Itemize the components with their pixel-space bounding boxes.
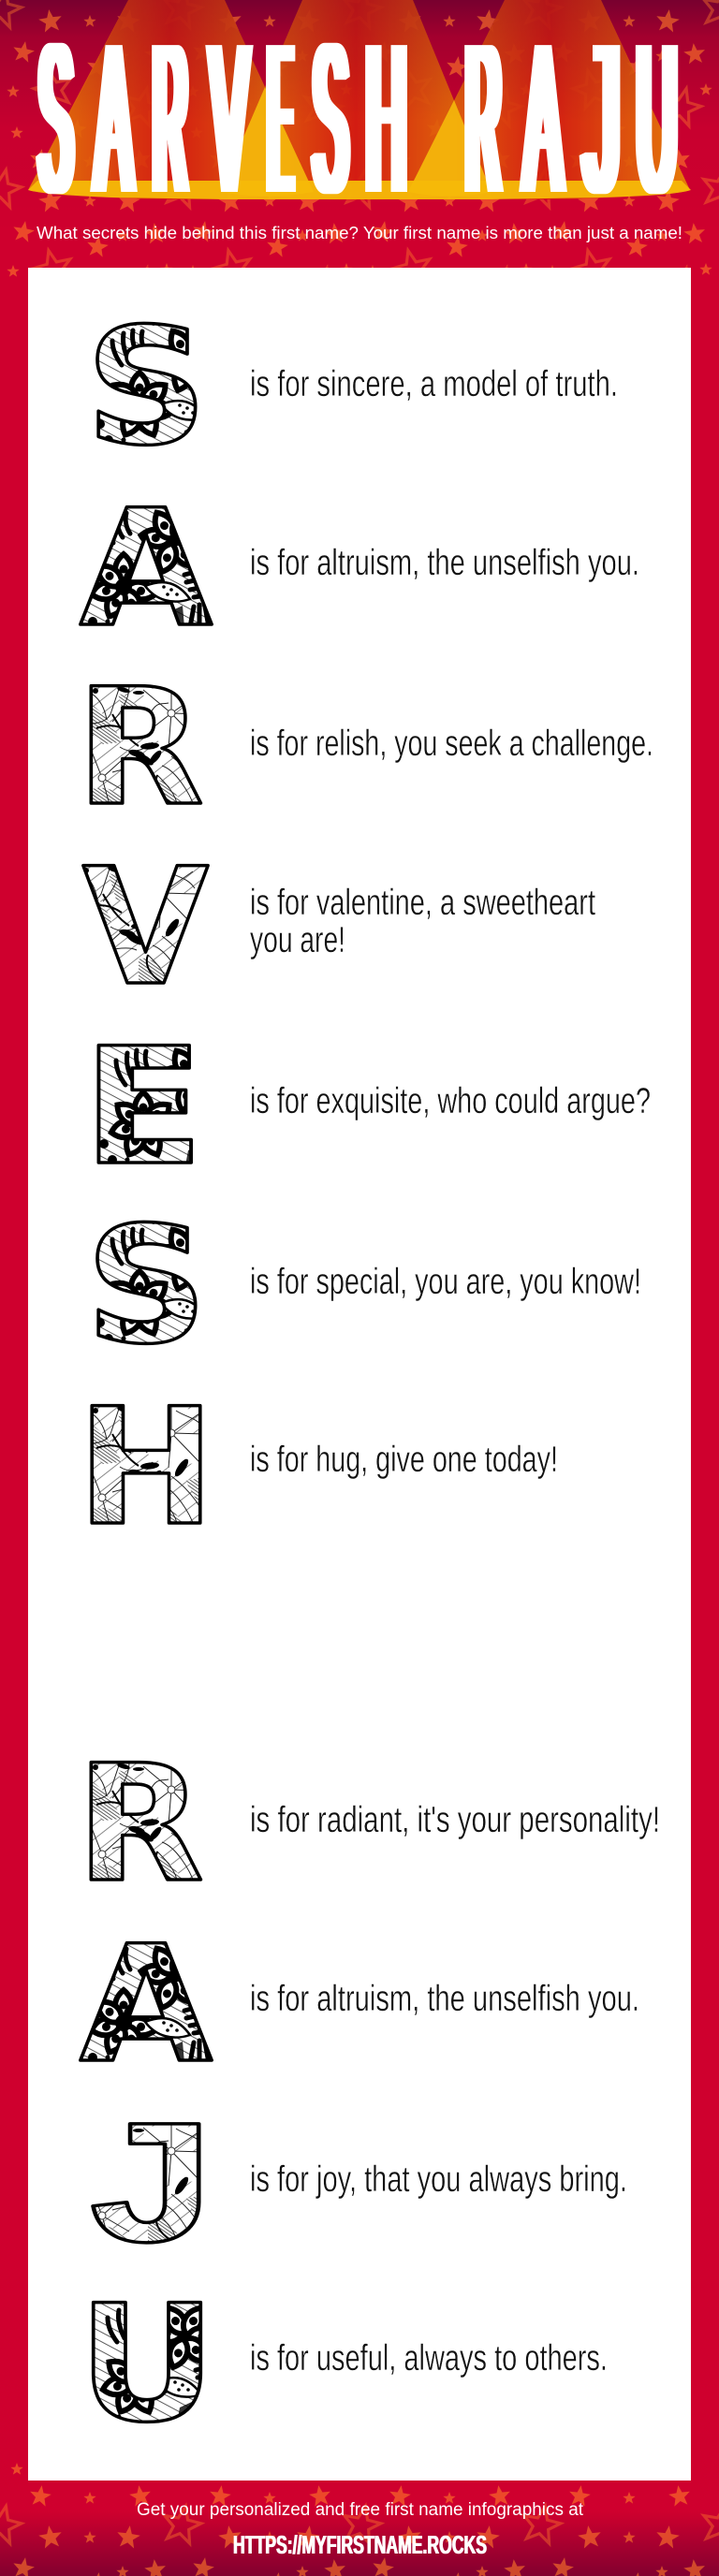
tagline: What secrets hide behind this first name? Your first name is more than just a name!: [37, 223, 682, 242]
title: J: [583, 0, 620, 238]
letter row: S: [85, 1192, 641, 1380]
title: A: [524, 0, 562, 238]
text: V: [250, 883, 595, 960]
text: H: is for hug, give one today!: [250, 1440, 558, 1480]
text: U: is for useful, always to others.: [250, 2338, 608, 2378]
spotlight overlap: [408, 100, 492, 197]
letter row: U: [78, 2270, 608, 2458]
icon: letter R: R: [76, 1730, 204, 1918]
title: [39, 0, 677, 238]
letter row: A: [80, 1910, 639, 2099]
letter row: E: [82, 1013, 651, 1201]
title: E: [269, 0, 292, 238]
icon: letter H: H: [77, 1373, 215, 1561]
letter row: R: [76, 653, 653, 842]
icon: letter S: S: [85, 293, 208, 481]
letter row: A: [80, 475, 639, 663]
text: V: you are!: [250, 920, 345, 960]
icon: letter S: S: [85, 1192, 208, 1380]
title: V: [211, 0, 248, 238]
title: S: [39, 0, 72, 238]
icon: letter A: A: [80, 1910, 213, 2099]
letter row: V: [82, 833, 595, 1021]
icon: letter V: V: [82, 833, 209, 1021]
footer url: HTTPS://MYFIRSTNAME.ROCKS: [233, 2530, 487, 2559]
title: S: [313, 0, 347, 238]
icon: letter J: J: [81, 2094, 223, 2295]
spotlights: [28, 0, 691, 200]
text: V: is for valentine, a sweetheart: [250, 883, 595, 923]
letter row: H: [77, 1373, 558, 1561]
icon: letter U: U: [78, 2270, 216, 2458]
footer text: Get your personalized and free first name infographics at: [137, 2500, 584, 2520]
spotlight overlap: [220, 87, 314, 197]
panel: white letter list: [28, 268, 691, 2481]
letter row: R: [76, 1730, 660, 1918]
icon: letter R: R: [76, 653, 204, 842]
title: A: [95, 0, 132, 238]
icon: letter E: E: [82, 1013, 204, 1201]
title: R: [466, 0, 501, 238]
title: H: [366, 0, 406, 238]
letter row: J: [81, 2094, 627, 2295]
icon: letter A: A: [80, 475, 213, 663]
letter row: S: [85, 293, 618, 481]
title: R: [154, 0, 187, 238]
stage floor: [28, 181, 691, 199]
